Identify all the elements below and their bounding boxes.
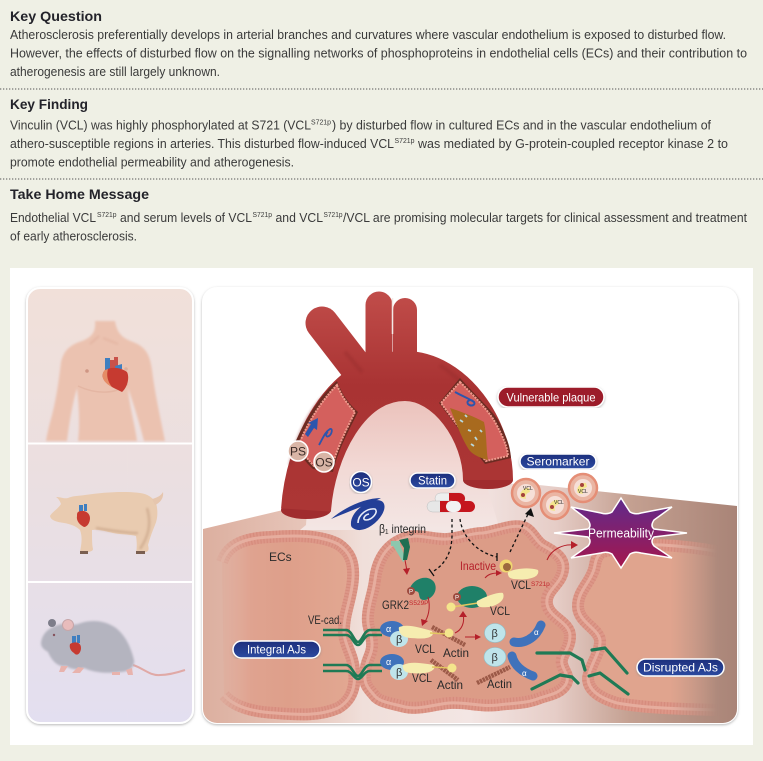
inhibition bars	[429, 553, 497, 576]
label: VCL central: VCL	[490, 604, 510, 618]
label: integral AJs	[233, 641, 320, 658]
label: VCL lower: VCL	[412, 671, 432, 685]
cell: right endothelial cell	[578, 545, 720, 710]
body: key finding	[10, 118, 728, 170]
text block: key question	[10, 8, 747, 79]
icon: seromarker particles: VCL	[578, 489, 588, 495]
label: OS: OS	[352, 476, 370, 490]
icon: phosphate: P	[409, 590, 413, 596]
icon: phosphate: P	[455, 596, 459, 602]
complex: upper junction	[380, 621, 465, 647]
body: key finding: S721p	[394, 136, 414, 145]
icon: seromarker particles	[512, 474, 597, 519]
label: seromarker: Seromarker	[526, 454, 590, 468]
icon: human heart	[103, 357, 128, 392]
icon: seromarker particles: VCL	[523, 486, 533, 492]
complex: lower junction: β	[396, 667, 402, 679]
icon: GRK2 kinase	[407, 578, 436, 600]
text block: key finding	[10, 96, 728, 170]
icon: statin capsules	[427, 493, 475, 512]
label: vulnerable plaque	[498, 387, 604, 407]
icon: flow spiral	[455, 392, 474, 405]
callout: PS: PS	[290, 444, 306, 458]
detached catenins	[477, 624, 541, 683]
label: VCL S721p: S721p	[531, 581, 550, 588]
detached catenins: β	[492, 652, 498, 664]
body: take home message: of early atherosclerosis.	[10, 230, 137, 244]
body: key finding: S721p	[311, 118, 331, 126]
icon: mouse with heart	[41, 619, 185, 675]
icon: beta1 integrin	[391, 538, 410, 562]
panel: arterial and cellular mechanism	[203, 288, 737, 723]
complex: upper junction: β	[396, 634, 402, 646]
label: ECs: ECs	[269, 550, 292, 564]
icon: pig heart	[77, 504, 90, 527]
label: actin detached: Actin	[487, 677, 512, 691]
detached catenins: β	[492, 628, 498, 640]
callout: OS: OS	[315, 456, 333, 470]
callout: permeability star	[554, 498, 687, 568]
arrows: statin inhibition and seromarker release	[432, 512, 529, 572]
label: VCL S721p	[511, 578, 550, 592]
detached catenins: α	[534, 628, 539, 637]
label: statin: Statin	[418, 474, 447, 488]
label: GRK2: GRK2	[382, 598, 409, 612]
plaque core	[450, 408, 488, 460]
complex: upper junction: α	[386, 624, 391, 634]
icon: human torso with heart	[46, 321, 165, 441]
arrowheads: red signalling	[403, 541, 578, 640]
label: disrupted AJs: Disrupted AJs	[643, 660, 718, 674]
figure background	[10, 268, 753, 745]
body: take home message	[10, 210, 748, 244]
label: beta1 integrin: β₁ integrin	[379, 522, 426, 536]
heading: take home message: Take Home Message	[10, 186, 149, 202]
label: GRK2: S529P	[409, 600, 429, 607]
label: integral AJs: Integral AJs	[247, 642, 306, 656]
junctions: disrupted adherens junctions	[532, 648, 628, 694]
panel: species models	[27, 288, 193, 723]
cell: left endothelial cell	[222, 536, 354, 714]
junctions: integral adherens junctions	[323, 630, 382, 679]
body: key finding: ) by disturbed flow in cultured ECs and in the vascular endothelium of	[332, 118, 712, 132]
aorta cut: vulnerable plaque	[439, 378, 511, 464]
detached catenins: α	[522, 669, 527, 678]
text block: take home message	[10, 186, 748, 244]
body: key finding: promote endothelial permeability and atherogenesis.	[10, 156, 294, 170]
complex: lower junction	[380, 654, 458, 680]
complex: inactive phosphorylated vinculin	[500, 560, 537, 578]
label: inactive: Inactive	[460, 559, 496, 573]
body: take home message: S721p	[324, 210, 342, 219]
body: take home message: and VCL	[276, 211, 323, 225]
aorta cut: protected and oscillatory flow	[295, 381, 358, 472]
body: key question	[10, 28, 747, 79]
body: take home message: and serum levels of VCL	[120, 211, 252, 225]
body: key question: Atherosclerosis preferentially develops in arterial branches and curvatures where vascular endothelium is exposed to disturbed flow.	[10, 28, 726, 42]
body: key question: atherogenesis are still largely unknown.	[10, 65, 220, 79]
icon: flow spiral	[319, 429, 332, 445]
body: key question: However, the effects of disturbed flow on the signalling networks of phosphoproteins in endothelial cells (ECs) and their contribution to	[10, 46, 747, 60]
body: key finding: athero-susceptible regions in arteries. This disturbed flow-induced VCL	[10, 137, 394, 151]
heading: key question: Key Question	[10, 8, 102, 24]
icon: pig with heart	[50, 492, 163, 554]
heading: key finding: Key Finding	[10, 96, 88, 112]
complex: GRK2 bound vinculin	[446, 586, 502, 612]
label: actin upper: Actin	[443, 646, 469, 660]
arrows: red signalling	[405, 545, 573, 637]
body: take home message: S721p	[252, 210, 272, 219]
icon: flow arrow	[305, 418, 318, 437]
callout: PS	[288, 441, 308, 461]
icon: mouse heart	[70, 635, 81, 655]
cell: central endothelial cell	[365, 526, 570, 708]
label: VCL upper: VCL	[415, 642, 435, 656]
complex: lower junction: α	[386, 657, 391, 667]
aorta	[281, 298, 513, 519]
label: statin	[410, 473, 455, 488]
arrowhead: seromarker	[525, 508, 534, 517]
body: key finding: Vinculin (VCL) was highly phosphorylated at S721 (VCL	[10, 118, 311, 132]
label: OS	[350, 472, 372, 492]
body: take home message: S721p	[97, 210, 116, 219]
icon: oscillatory flow spiral	[331, 498, 384, 530]
label: actin lower: Actin	[437, 678, 463, 692]
body: take home message: /VCL are promising molecular targets for clinical assessment and treatment	[343, 211, 748, 225]
body: take home message: Endothelial VCL	[10, 211, 96, 225]
body: key finding: was mediated by G-protein-coupled receptor kinase 2 to	[417, 137, 728, 151]
callout: permeability star: Permeability	[588, 526, 654, 540]
label: VE-cad: VE-cad.	[308, 613, 342, 627]
icon: seromarker particles: VCL	[554, 500, 564, 506]
label: VCL S721p: VCL	[511, 578, 531, 592]
callout: OS	[314, 452, 334, 472]
label: vulnerable plaque: Vulnerable plaque	[506, 390, 596, 404]
